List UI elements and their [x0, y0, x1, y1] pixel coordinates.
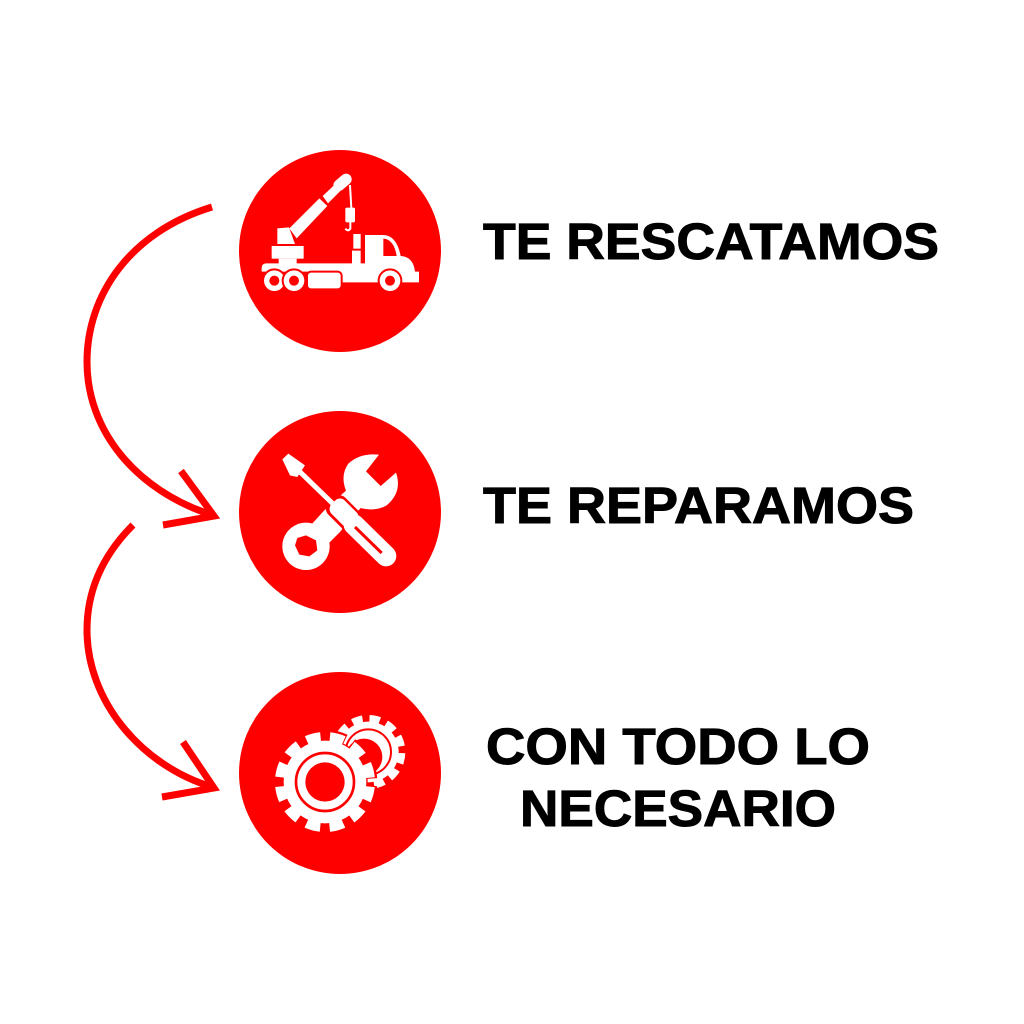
- arrow: rescue to repair: [87, 207, 214, 525]
- large gear outline: [280, 737, 370, 827]
- arrow: repair to parts: [87, 525, 214, 797]
- heading: te reparamos: TE REPARAMOS: [483, 477, 914, 534]
- step 3 icon: gears: [239, 672, 441, 874]
- heading: con todo lo necesario: [486, 718, 870, 837]
- small gear: [335, 719, 402, 785]
- large gear: [280, 737, 370, 827]
- wrench: [282, 454, 398, 570]
- step 2 icon: wrench and screwdriver: [239, 411, 441, 613]
- heading: con todo lo necesario: CON TODO LO: [486, 718, 870, 775]
- heading: con todo lo necesario: NECESARIO: [520, 780, 836, 837]
- screwdriver: [282, 454, 386, 556]
- step 1 icon: tow truck crane: [239, 150, 441, 352]
- heading: te rescatamos: TE RESCATAMOS: [483, 213, 939, 270]
